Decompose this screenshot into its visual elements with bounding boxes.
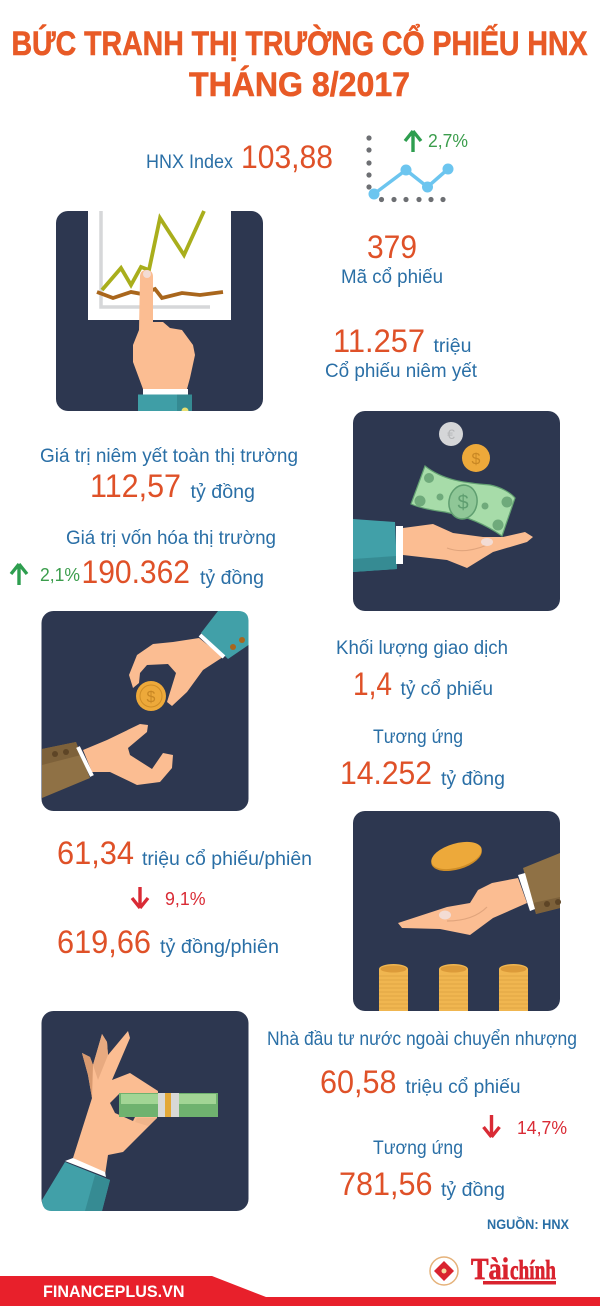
- icon: hand: [65, 1031, 158, 1177]
- stat: HNX Index: 103,88: [241, 139, 333, 175]
- stat: market capitalisation: 2,1%: [40, 565, 80, 585]
- stat: foreign value: 781,56: [339, 1166, 432, 1202]
- stat: trading volume: Khối lượng giao dịch: [336, 638, 508, 659]
- icon: down arrow 14,7%: [484, 1115, 567, 1138]
- stat: foreign investors: 60,58: [320, 1064, 396, 1100]
- stat: value per session: tỷ đồng/phiên: [160, 937, 279, 958]
- stat: market capitalisation: [11, 528, 276, 590]
- icon: silver coin: [439, 422, 463, 446]
- stat: foreign investors: Nhà đầu tư nước ngoài chuyển nhượng: [267, 1029, 577, 1050]
- icon: line chart: [366, 135, 454, 202]
- stat: foreign value: tỷ đồng: [441, 1180, 505, 1201]
- panel: hand holding cash: [42, 1011, 248, 1211]
- logo: Tài chính: [430, 1251, 556, 1286]
- stat: 379: Mã cổ phiếu: [341, 267, 443, 288]
- icon: silver coin: €: [447, 426, 455, 442]
- icon: down arrow 9,1%: 9,1%: [165, 889, 206, 909]
- icon: down arrow 14,7%: 14,7%: [517, 1118, 567, 1138]
- logo: Tài chính: chính: [510, 1255, 556, 1285]
- stat: trading volume: tỷ cổ phiếu: [400, 679, 493, 700]
- icon: gold coin: [462, 444, 490, 472]
- icon: banknote: [411, 466, 515, 536]
- stat: foreign investors: [267, 1029, 577, 1100]
- source note: NGUỒN: HNX: [487, 1215, 570, 1232]
- panel: finger pointing at chart: [56, 211, 263, 411]
- icon: coin: [136, 681, 166, 711]
- icon: up arrow 2,7%: [405, 131, 468, 152]
- stat: equivalent value: Tương ứng: [373, 727, 463, 748]
- stat: listed value: Giá trị niêm yết toàn thị trường: [40, 446, 298, 467]
- logo: Tài chính: Tài: [471, 1251, 509, 1286]
- icon: coin: $: [147, 689, 156, 706]
- icon: sleeve: [42, 1162, 110, 1211]
- stat: listed value: tỷ đồng: [190, 482, 255, 503]
- stat: market capitalisation: 190.362: [82, 554, 190, 590]
- icon: coin stacks: [379, 964, 528, 1011]
- stat: HNX Index: [146, 139, 333, 175]
- icon: down arrow 9,1%: [132, 887, 206, 909]
- panel: hand dropping coin on stacks: [353, 811, 561, 1011]
- icon: pointing hand: [133, 270, 195, 411]
- stat: value per session: 619,66: [57, 924, 151, 960]
- footer banner: FINANCEPLUS.VN: [43, 1282, 184, 1301]
- stat: listed value: 112,57: [90, 468, 181, 504]
- title: [12, 25, 588, 104]
- stat: 11.257: Cổ phiếu niêm yết: [325, 361, 478, 382]
- icon: banknote: $: [457, 492, 469, 514]
- icon: hand with sleeve: [398, 853, 561, 935]
- stat: foreign value: [339, 1138, 505, 1202]
- stat: HNX Index: HNX Index: [146, 152, 233, 173]
- icon: banknote bundle: [119, 1093, 218, 1126]
- icon: flying coin: [428, 837, 485, 876]
- panel: hand with banknote and coins: [353, 411, 560, 611]
- stat: equivalent value: [340, 727, 505, 791]
- stat: 379: [341, 229, 443, 288]
- stat: trading volume: 1,4: [353, 666, 392, 702]
- footer banner: [0, 1276, 600, 1306]
- stat: foreign investors: triệu cổ phiếu: [406, 1077, 520, 1098]
- icon: open hand with sleeve: [353, 519, 533, 572]
- icon: gold coin: $: [472, 451, 481, 468]
- stat: listed value: [40, 446, 298, 504]
- title: THÁNG 8/2017: [189, 66, 410, 104]
- chart paper: [88, 211, 231, 320]
- stat: 11.257: [325, 323, 478, 382]
- stat: equivalent value: tỷ đồng: [441, 769, 505, 790]
- stat: volume per session: [57, 835, 312, 871]
- stat: 11.257: triệu: [434, 336, 472, 357]
- stat: 11.257: 11.257: [333, 323, 425, 359]
- icon: upper hand: [129, 611, 248, 706]
- stat: foreign value: Tương ứng: [373, 1138, 463, 1159]
- stat: volume per session: 61,34: [57, 835, 134, 871]
- stat: value per session: [57, 924, 279, 960]
- stat: trading volume: [336, 638, 508, 702]
- stat: market capitalisation: Giá trị vốn hóa thị trường: [66, 528, 276, 549]
- panel: hands passing coin: [42, 611, 248, 811]
- stat: 379: 379: [367, 229, 417, 265]
- stat: volume per session: triệu cổ phiếu/phiên: [142, 849, 312, 870]
- stat: market capitalisation: tỷ đồng: [200, 568, 264, 589]
- icon: lower hand: [42, 724, 173, 798]
- stat: equivalent value: 14.252: [340, 755, 432, 791]
- icon: up arrow 2,7%: 2,7%: [428, 131, 468, 151]
